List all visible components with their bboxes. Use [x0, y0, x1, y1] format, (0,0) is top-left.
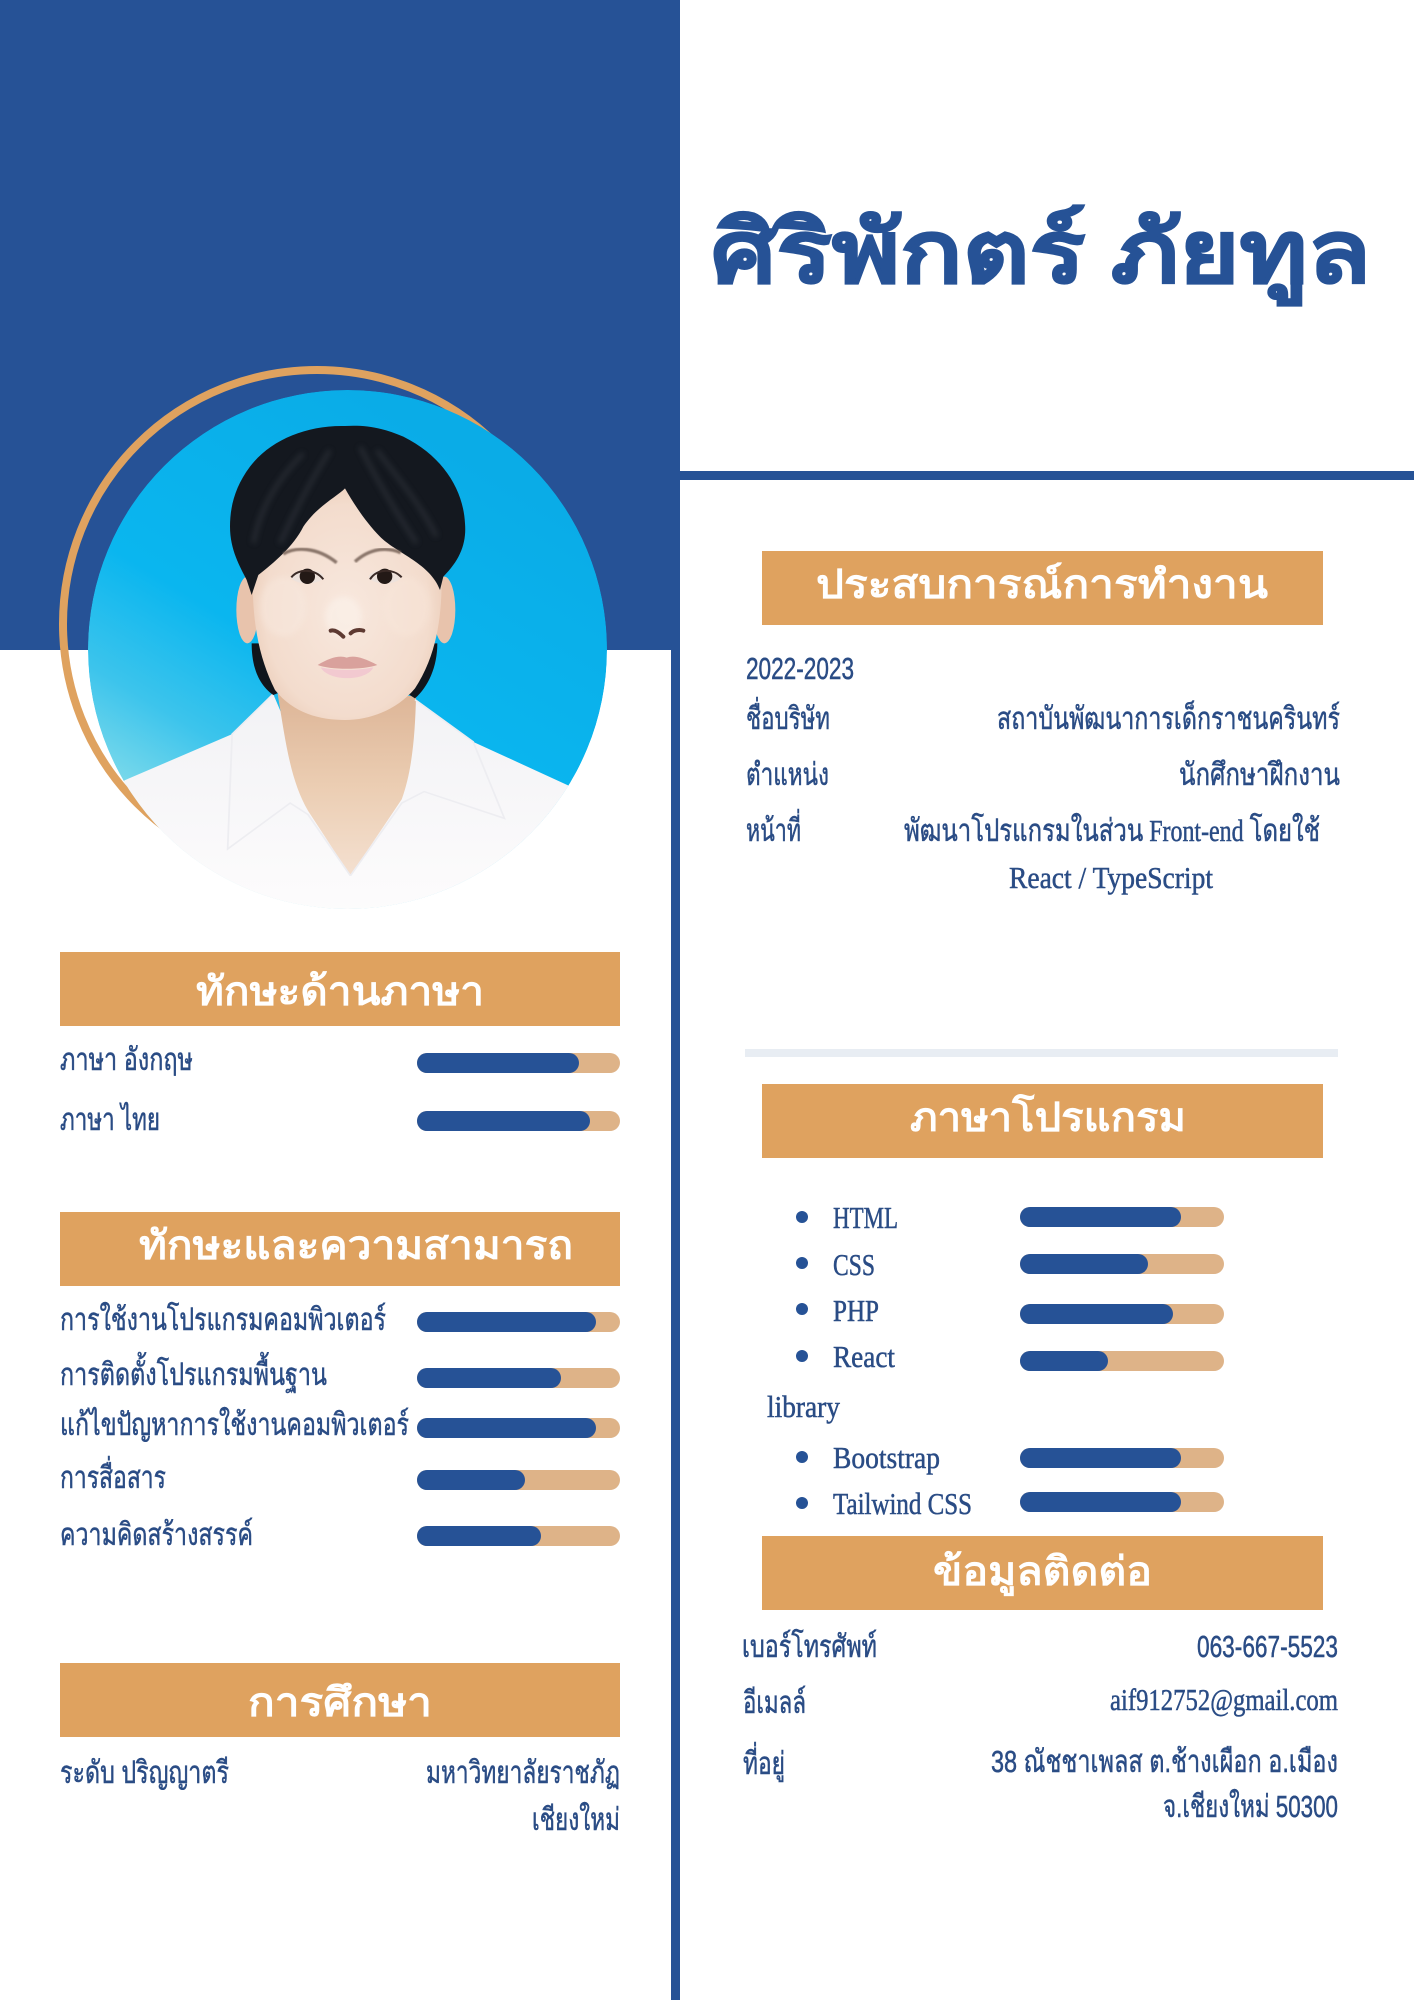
- heading: language skills: [60, 952, 620, 1026]
- skill: English: ภาษา อังกฤษ: [60, 1042, 193, 1077]
- heading: contact: [762, 1536, 1323, 1610]
- university: [426, 1755, 620, 1837]
- language: PHP: [796, 1293, 1224, 1328]
- skill: Thai: ภาษา ไทย: [60, 1102, 160, 1137]
- heading: language skills: ทักษะด้านภาษา: [196, 970, 484, 1014]
- panel: contact: [742, 1536, 1338, 1824]
- skill: software install: การติดตั้งโปรแกรมพื้นฐาน: [60, 1352, 327, 1393]
- university: มหาวิทยาลัยราชภัฏ: [426, 1755, 620, 1790]
- skill: troubleshooting: แก้ไขปัญหาการใช้งานคอมพิวเตอร์: [60, 1407, 409, 1442]
- language: CSS: [796, 1247, 1224, 1282]
- phone: เบอร์โทรศัพท์: [742, 1629, 877, 1664]
- language: HTML: [796, 1200, 1224, 1235]
- vertical column divider: [671, 650, 680, 2000]
- address: ที่อยู่: [743, 1742, 785, 1782]
- university: เชียงใหม่: [532, 1802, 620, 1837]
- email: aif912752@gmail.com: [1110, 1682, 1338, 1717]
- heading: work experience: [762, 551, 1323, 625]
- library: Bootstrap: [796, 1440, 1224, 1475]
- portrait photo: [88, 390, 607, 909]
- email: [743, 1682, 1338, 1720]
- position: ตำแหน่ง: [746, 757, 829, 792]
- section divider: [745, 1049, 1338, 1057]
- heading: education: [60, 1663, 620, 1737]
- duties: หน้าที่: [746, 809, 801, 848]
- years: 2022-2023: [746, 651, 854, 686]
- heading: abilities: [60, 1212, 620, 1286]
- library: Tailwind CSS: Tailwind CSS: [833, 1486, 972, 1521]
- gold ring behind portrait: [63, 370, 571, 878]
- heading: programming languages: ภาษาโปรแกรม: [910, 1094, 1186, 1140]
- skill: creativity: ความคิดสร้างสรรค์: [60, 1517, 253, 1552]
- skill: Thai: [60, 1102, 620, 1137]
- heading: education: การศึกษา: [248, 1681, 432, 1725]
- skill: software install: [60, 1352, 620, 1393]
- title: name: ศิริพักตร์ ภัยทูล: [711, 205, 1371, 306]
- position: [746, 757, 1340, 792]
- education level: ระดับ ปริญญาตรี: [60, 1755, 229, 1790]
- address: จ.เชียงใหม่ 50300: [1163, 1789, 1338, 1824]
- horizontal rule under name: [680, 471, 1414, 480]
- panel: abilities: [60, 1212, 620, 1552]
- heading: abilities: ทักษะและความสามารถ: [139, 1224, 573, 1268]
- heading: work experience: ประสบการณ์การทำงาน: [816, 562, 1268, 607]
- duties: React / TypeScript: [1009, 860, 1213, 895]
- panel: education: [60, 1663, 620, 1837]
- company: [746, 697, 1340, 736]
- heading: programming languages: [762, 1084, 1323, 1158]
- heading: contact: ข้อมูลติดต่อ: [933, 1550, 1152, 1596]
- panel: programming languages: [762, 1084, 1323, 1521]
- panel: language skills: [60, 952, 620, 1137]
- skill: English: [60, 1042, 620, 1077]
- phone: [742, 1629, 1338, 1664]
- skill: computer use: การใช้งานโปรแกรมคอมพิวเตอร์: [60, 1302, 386, 1337]
- blue header block: [0, 0, 680, 650]
- library: Bootstrap: Bootstrap: [833, 1440, 940, 1475]
- language: React: React: [833, 1339, 895, 1374]
- language: CSS: CSS: [833, 1247, 875, 1282]
- language: React: [796, 1339, 1224, 1374]
- skill: creativity: [60, 1517, 620, 1552]
- language: PHP: PHP: [833, 1293, 879, 1328]
- duties: [746, 809, 1320, 895]
- email: อีเมลล์: [743, 1685, 806, 1720]
- phone: 063-667-5523: [1197, 1629, 1338, 1664]
- skill: communication: การสื่อสาร: [60, 1456, 166, 1495]
- panel: work experience: [746, 551, 1340, 895]
- address: [743, 1742, 1338, 1824]
- company: ชื่อบริษัท: [746, 697, 830, 736]
- library subheading: library: [767, 1389, 840, 1424]
- library: Tailwind CSS: [796, 1486, 1224, 1521]
- language: HTML: HTML: [833, 1200, 898, 1235]
- skill: communication: [60, 1456, 620, 1495]
- position: นักศึกษาฝึกงาน: [1179, 757, 1340, 792]
